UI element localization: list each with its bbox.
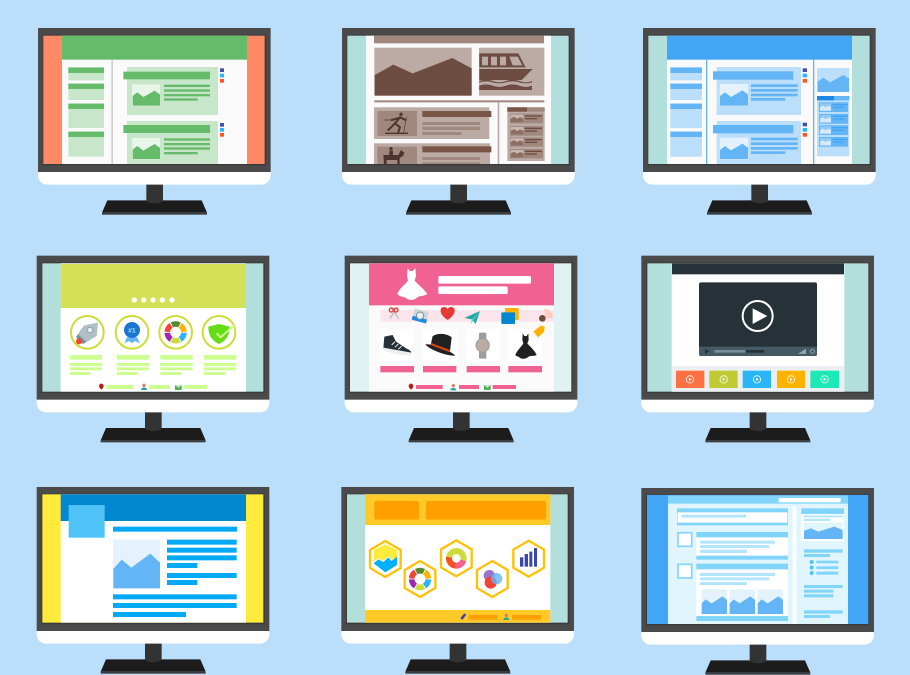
icon: black dress	[515, 333, 537, 359]
icon: heart	[441, 307, 455, 320]
screen 2	[347, 36, 569, 164]
icon: hat	[425, 334, 455, 356]
icon: skier	[384, 113, 408, 133]
monitor 9: light blue dashboard site	[641, 488, 874, 675]
icon: hand	[539, 309, 553, 322]
screen 3	[648, 36, 870, 164]
icon: scissors	[389, 307, 399, 318]
icon: tag	[533, 326, 545, 337]
screen 7	[42, 494, 263, 623]
icon: watch	[476, 333, 489, 359]
screen 5	[350, 263, 571, 392]
monitor 4: lime landing page	[37, 256, 269, 442]
monitor 3: blue blog site	[643, 28, 876, 215]
icon: bar chart	[520, 548, 537, 567]
icon: area chart hexagon	[374, 544, 397, 572]
icon: horse rider	[383, 147, 404, 164]
icon: #1 ribbon badge	[124, 322, 140, 343]
monitor 5: pink shop site	[345, 256, 577, 442]
monitor 7: yellow and blue article site	[37, 487, 269, 674]
icon: colour ring	[408, 567, 432, 591]
icon: boat	[479, 53, 533, 90]
screen 1	[43, 36, 265, 164]
monitor 6: video site	[641, 256, 874, 442]
video player	[699, 282, 817, 356]
icon: shield	[208, 324, 234, 344]
icon: rocket	[76, 323, 98, 344]
monitor 8: amber infographic site	[341, 487, 574, 674]
screen 9	[647, 495, 868, 624]
icon: camera	[412, 308, 429, 323]
screen 4	[42, 263, 263, 392]
icon: colour ring	[164, 321, 187, 344]
icon: sneaker	[383, 335, 411, 355]
screen 8	[347, 494, 568, 623]
icon: wallet	[501, 308, 519, 324]
monitor 1: green and orange site	[38, 28, 271, 215]
screen 6	[647, 263, 868, 392]
icon: venn circles	[484, 570, 502, 589]
icon: #1 ribbon badge: #1	[128, 327, 136, 334]
icon: white dress	[397, 268, 427, 300]
monitor 2: brown travel site	[342, 28, 575, 215]
icon: paper plane	[464, 311, 480, 324]
icon: donut chart	[447, 549, 465, 567]
icon: pencil	[460, 613, 466, 620]
